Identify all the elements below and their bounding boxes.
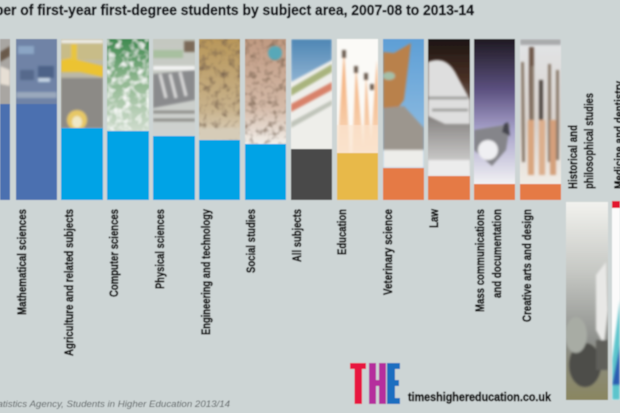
- column: education: [337, 39, 380, 200]
- label: all subjects: All subjects: [290, 209, 304, 262]
- label: philosophical studies: philosophical studies: [582, 93, 596, 189]
- label: veterinary science: Veterinary science: [381, 209, 395, 295]
- website address: timeshighereducation.co.uk: [408, 390, 551, 404]
- column: cropped first subject: [0, 39, 10, 200]
- image: historical and philosophical studies: [565, 202, 608, 400]
- label: agriculture: Agriculture and related subjects: [62, 209, 76, 356]
- column: social studies: [245, 39, 286, 200]
- column: mass communications and documentation: [474, 39, 515, 200]
- axis labels: [15, 81, 620, 356]
- label: computer sciences: Computer sciences: [107, 209, 121, 297]
- column: all subjects: [291, 39, 332, 200]
- column: computer sciences: [107, 39, 149, 200]
- logo: THE: [350, 363, 400, 404]
- label: physical sciences: Physical sciences: [153, 209, 167, 289]
- column: physical sciences: [153, 39, 195, 200]
- label: social studies: Social studies: [244, 209, 258, 273]
- label: education: Education: [335, 209, 349, 255]
- label: historical and: Historical and: [566, 125, 580, 189]
- label: creative arts and design: Creative arts and design: [520, 209, 534, 322]
- label: mathematical sciences: Mathematical sciences: [15, 209, 29, 315]
- column: law: [428, 39, 470, 200]
- label: engineering and technology: Engineering and technology: [199, 209, 213, 335]
- label: law: Law: [427, 208, 441, 228]
- column: agriculture and related subjects: [61, 39, 103, 200]
- image: medicine and dentistry: [612, 201, 620, 400]
- column: veterinary science: [383, 39, 424, 200]
- label: and documentation: and documentation: [490, 209, 504, 298]
- column: engineering and technology: [199, 39, 240, 200]
- column: mathematical sciences: [16, 39, 57, 200]
- bar chart: subject areas: [0, 39, 561, 200]
- label: mass communications: Mass communications: [473, 209, 487, 312]
- column: creative arts and design: [520, 39, 561, 200]
